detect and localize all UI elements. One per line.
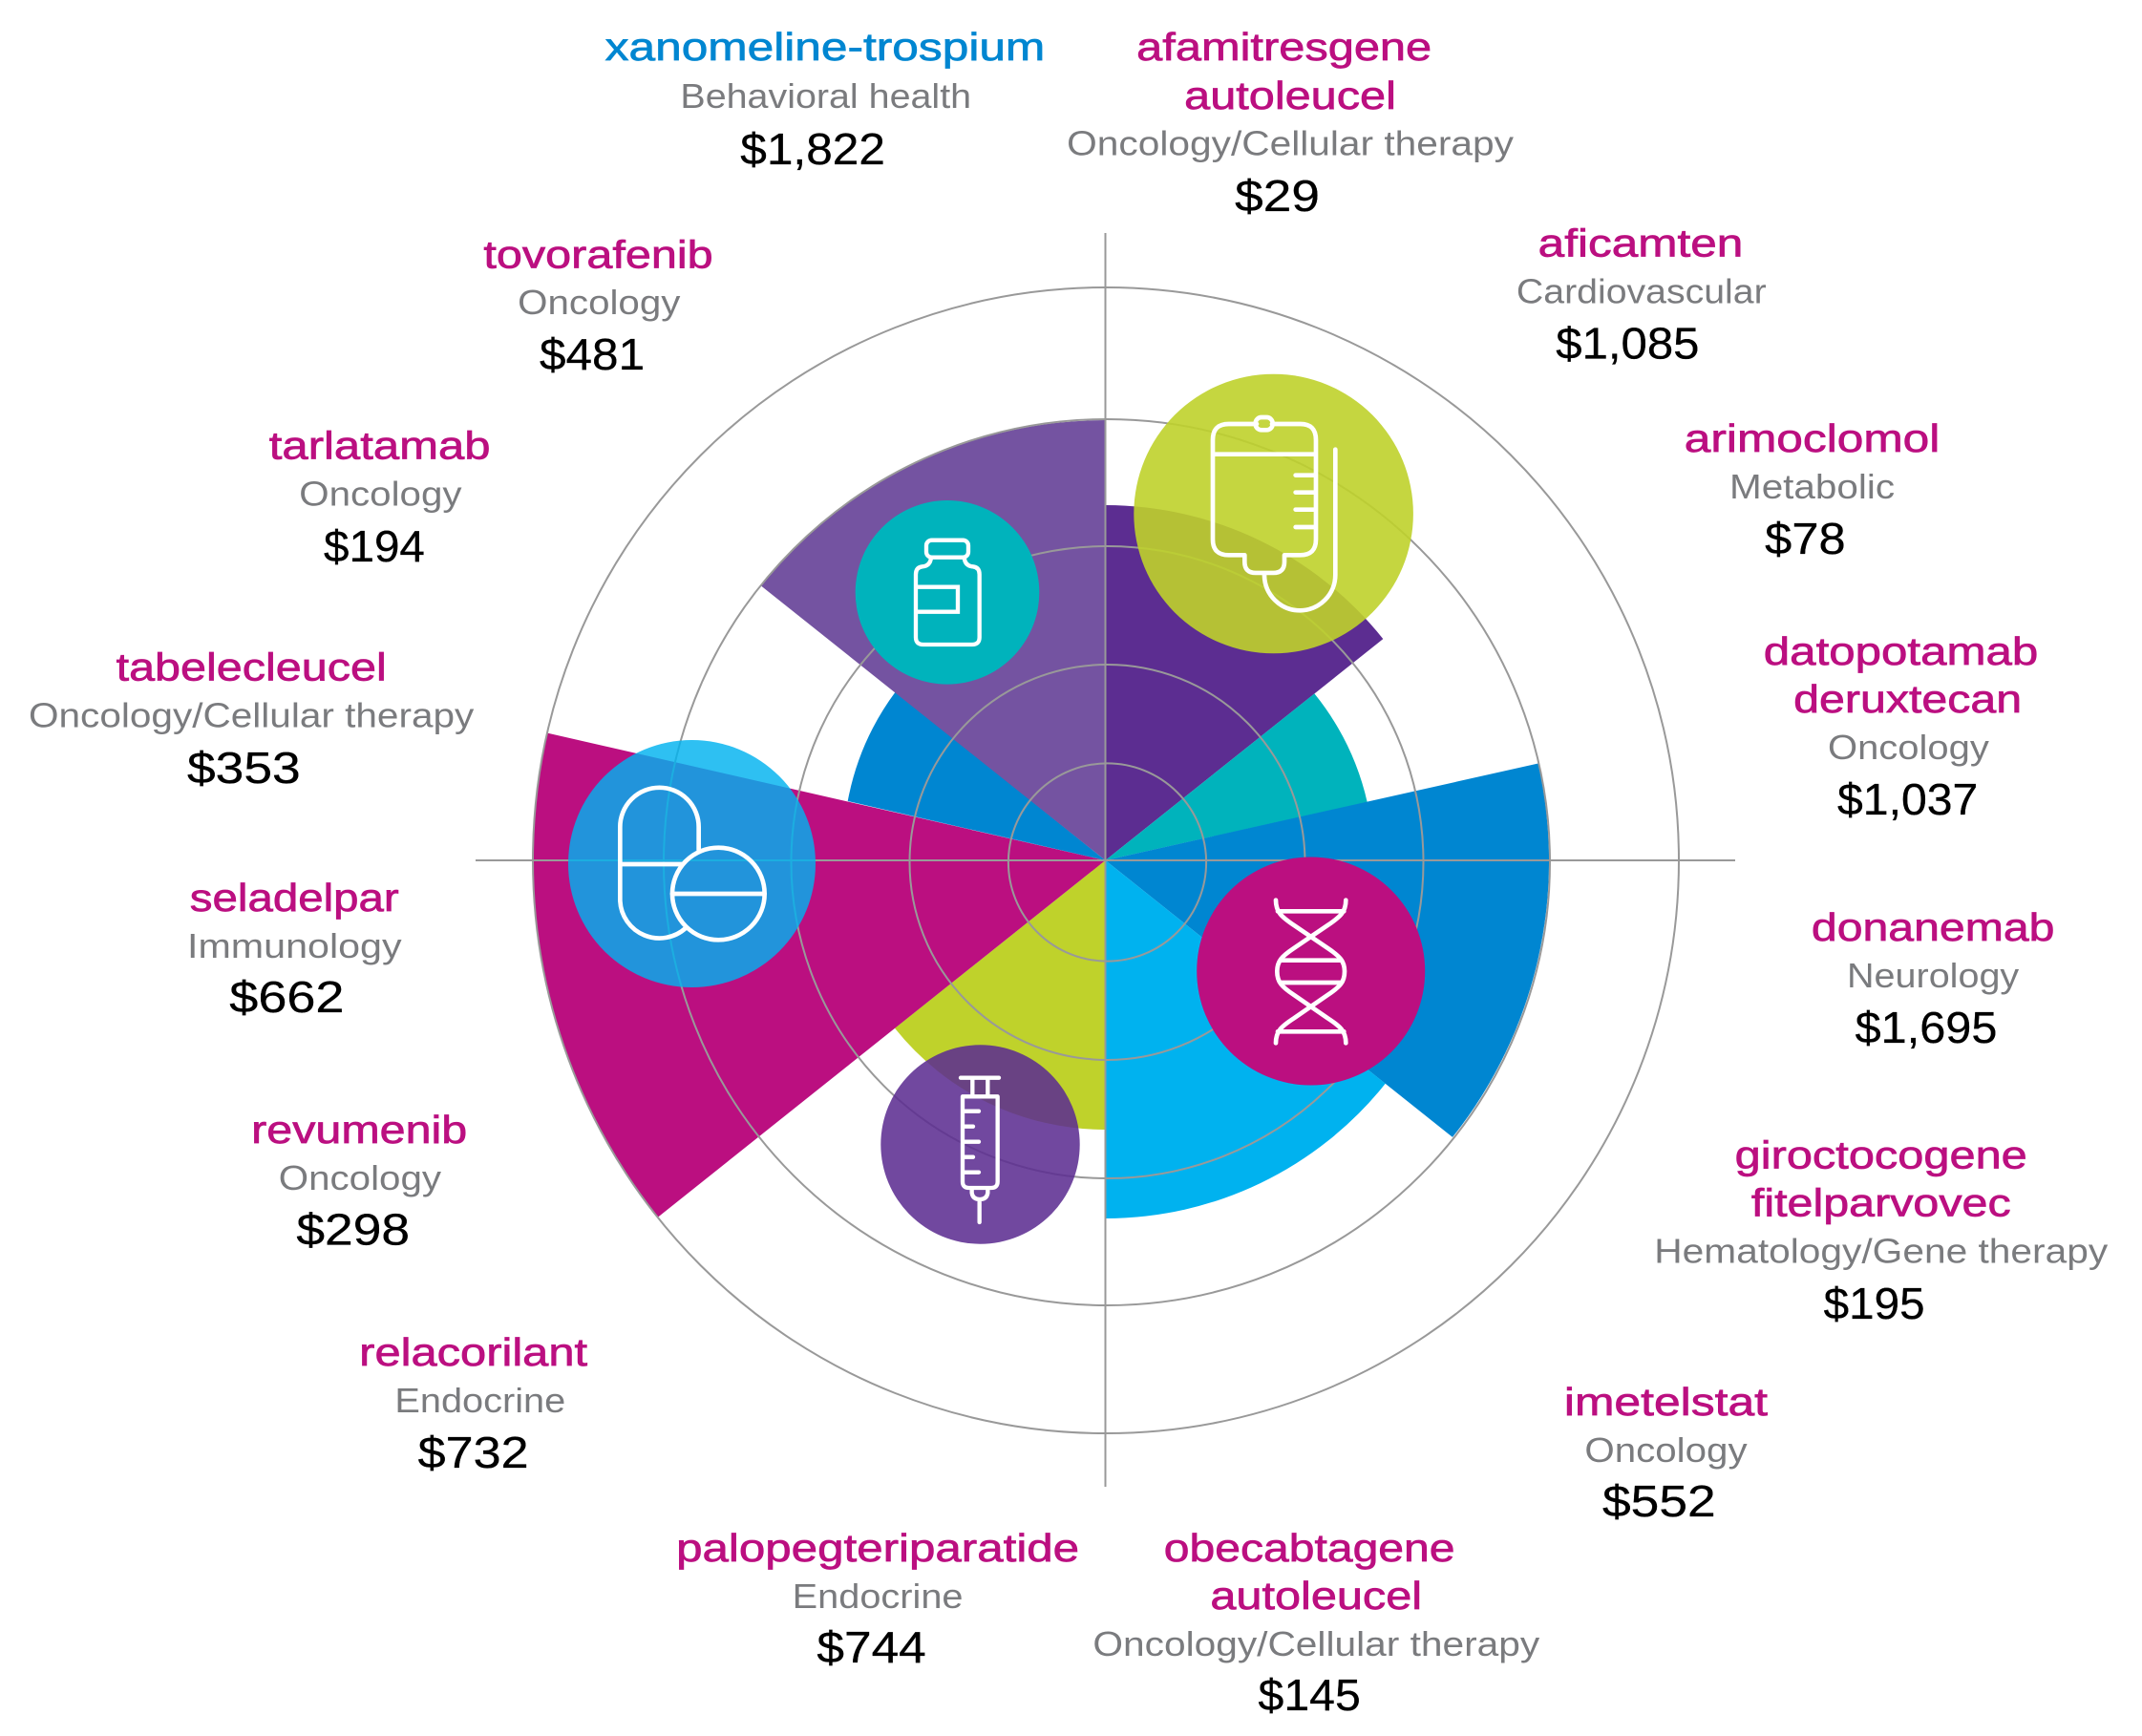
label: obecabtagene autoleucel: $145 [1259,1670,1361,1720]
label: revumenib: revumenib [251,1108,467,1152]
label: giroctocogene fitelparvovec: $195 [1824,1279,1925,1328]
label: relacorilant: relacorilant [359,1330,588,1374]
wedge: teal [1106,693,1368,860]
label: aficamten: aficamten [1538,222,1743,265]
label: afamitresgene autoleucel: autoleucel [1184,74,1396,117]
label: seladelpar [187,876,402,1022]
label: seladelpar: Immunology [187,926,402,965]
label: revumenib [251,1108,467,1255]
label: afamitresgene autoleucel: afamitresgene [1136,25,1432,69]
label: giroctocogene fitelparvovec: fitelparvovec [1751,1180,2011,1224]
label: tabelecleucel: $353 [187,743,301,793]
label: revumenib: Oncology [279,1158,441,1197]
label: tovorafenib: $481 [540,329,645,379]
label: donanemab: $1,695 [1856,1003,1997,1052]
wedge: dark purple [1106,505,1383,860]
icon: syringe [880,1045,1080,1244]
label: imetelstat [1564,1380,1769,1526]
label: xanomeline-trospium: xanomeline-trospium [605,25,1045,69]
label: tarlatamab: tarlatamab [269,424,491,468]
wedge: blue small [848,691,1106,860]
label: afamitresgene autoleucel: Oncology/Cellular therapy [1067,124,1514,162]
label: xanomeline-trospium: Behavioral health [680,76,971,116]
label: tovorafenib [483,233,713,379]
label: obecabtagene autoleucel: Oncology/Cellular therapy [1092,1624,1539,1663]
label: arimoclomol: arimoclomol [1685,416,1940,460]
label: donanemab [1812,905,2055,1052]
label: imetelstat: $552 [1602,1476,1716,1526]
label: datopotamab deruxtecan: $1,037 [1837,774,1978,824]
icon: vial [856,500,1039,685]
polar chart wedges [533,420,1549,1218]
label: arimoclomol: $78 [1765,514,1846,563]
label: datopotamab deruxtecan: Oncology [1828,728,1989,767]
label: tabelecleucel [29,645,474,793]
label: arimoclomol: Metabolic [1729,467,1895,506]
wedge: magenta [533,733,1106,1217]
label: aficamten: Cardiovascular [1516,271,1767,311]
label: imetelstat: Oncology [1584,1430,1748,1470]
label: obecabtagene autoleucel: obecabtagene [1164,1526,1455,1570]
label: obecabtagene autoleucel: autoleucel [1210,1574,1422,1618]
label: palopegteriparatide: palopegteriparatide [676,1526,1079,1570]
label: seladelpar: seladelpar [190,876,399,920]
label: xanomeline-trospium [605,25,1045,174]
icon: pills [568,740,816,987]
label: palopegteriparatide: $744 [817,1622,926,1672]
wedge: light purple [761,420,1106,860]
label: relacorilant: $732 [418,1428,529,1477]
label: donanemab: donanemab [1812,905,2055,949]
label: relacorilant: Endocrine [394,1381,565,1420]
label: imetelstat: imetelstat [1564,1380,1769,1424]
label: datopotamab deruxtecan: deruxtecan [1793,677,2022,721]
icon: DNA helix [1197,857,1425,1085]
label: palopegteriparatide: Endocrine [793,1577,963,1616]
polar grid rings and axes [476,233,1735,1487]
wedge: light blue [1106,860,1386,1218]
label: donanemab: Neurology [1847,956,2019,995]
label: afamitresgene autoleucel [1067,25,1514,221]
label: tarlatamab: $194 [324,521,425,571]
label: arimoclomol [1685,416,1940,563]
label: tovorafenib: Oncology [518,283,680,322]
label: aficamten: $1,085 [1556,319,1700,369]
label: seladelpar: $662 [229,972,344,1022]
label: giroctocogene fitelparvovec: giroctocogene [1735,1133,2027,1176]
label: aficamten [1516,222,1767,369]
label: xanomeline-trospium: $1,822 [740,124,885,174]
label: datopotamab deruxtecan: datopotamab [1764,629,2038,673]
label: datopotamab deruxtecan [1764,629,2038,824]
label: giroctocogene fitelparvovec [1654,1133,2108,1328]
wedge: blue large [1106,764,1549,1137]
icon: IV bag [1134,374,1413,653]
wedge: lime [895,860,1106,1130]
label: afamitresgene autoleucel: $29 [1235,171,1320,221]
label: giroctocogene fitelparvovec: Hematology/Gene therapy [1654,1232,2108,1271]
label: revumenib: $298 [296,1205,410,1255]
label: tabelecleucel: Oncology/Cellular therapy [29,696,474,735]
label: obecabtagene autoleucel [1092,1526,1539,1720]
label: relacorilant [359,1330,588,1477]
label: tovorafenib: tovorafenib [483,233,713,277]
label: tarlatamab [269,424,491,571]
label: tarlatamab: Oncology [299,474,461,513]
label: tabelecleucel: tabelecleucel [117,645,387,688]
label: palopegteriparatide [676,1526,1079,1672]
